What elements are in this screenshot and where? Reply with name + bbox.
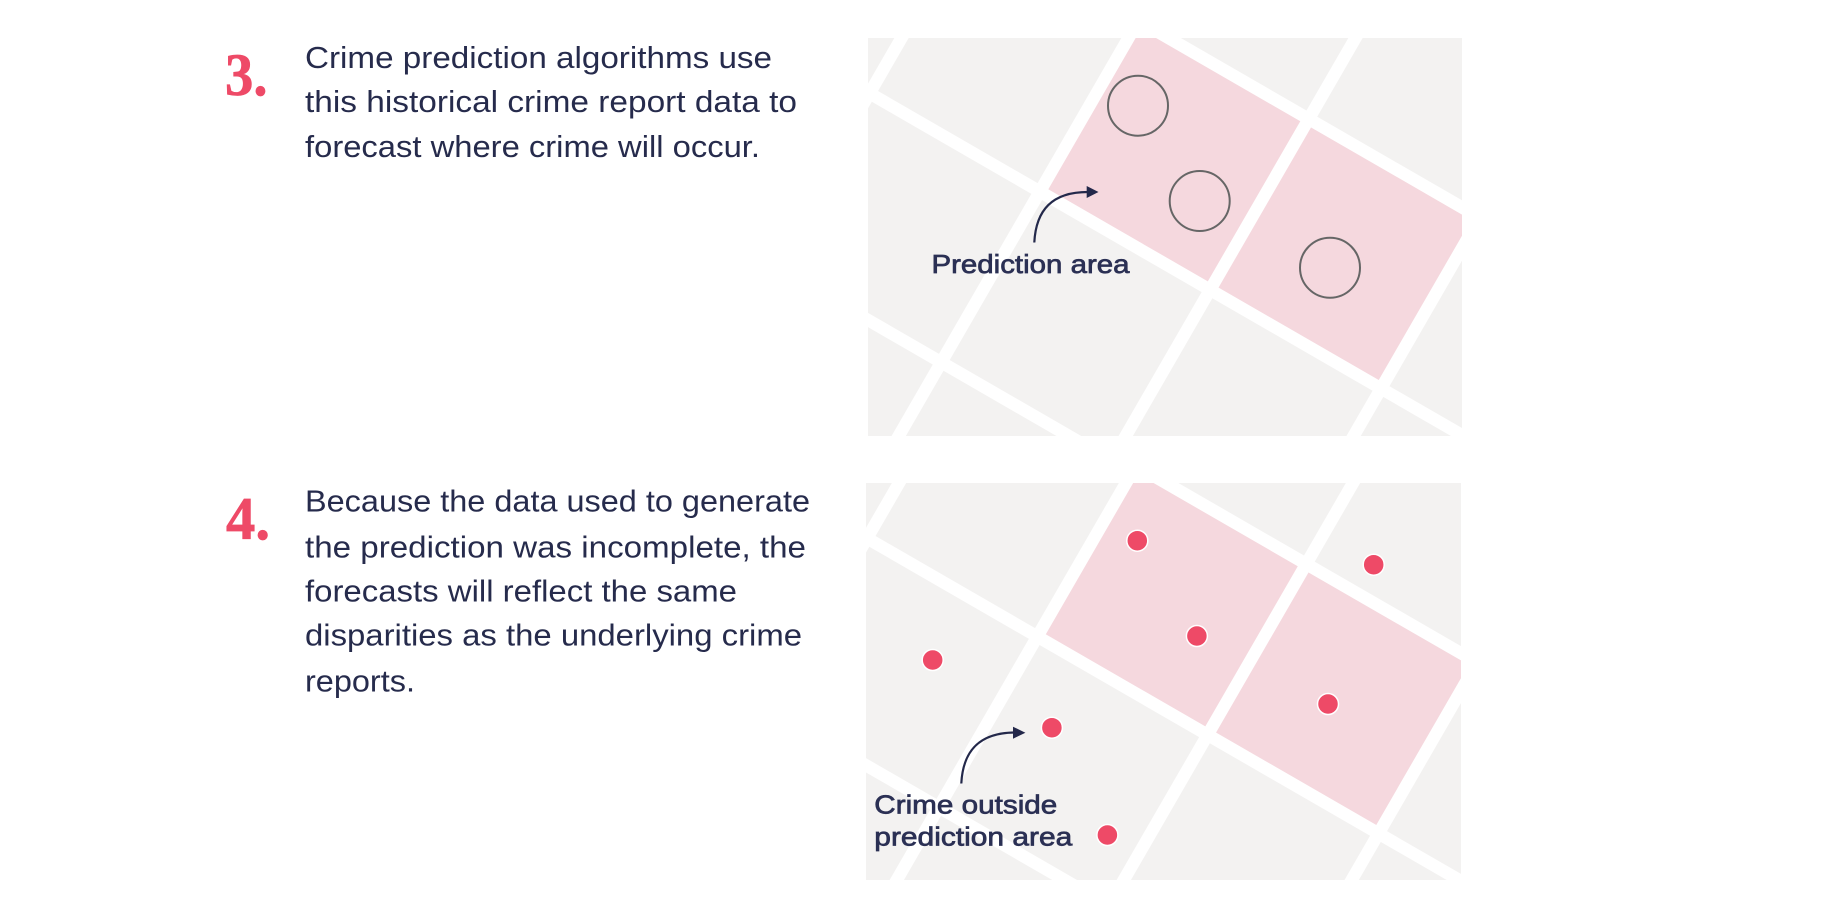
step 3 description: Crime prediction algorithms use	[305, 40, 772, 75]
arrow to crime outside prediction area	[961, 727, 1025, 784]
step 4 description: the prediction was incomplete, the	[305, 530, 806, 564]
crime report dots	[922, 530, 1384, 846]
step 4 description: Because the data used to generate	[305, 484, 810, 518]
label: crime outside prediction area: Crime outside	[874, 790, 1057, 820]
map background and streets	[868, 38, 1462, 436]
step 3 description	[305, 40, 797, 164]
step 3 description: forecast where crime will occur.	[305, 129, 760, 164]
step 4 description: disparities as the underlying crime	[305, 618, 802, 652]
step 4 description	[305, 484, 810, 698]
panel: prediction area map	[868, 38, 1462, 436]
label: crime outside prediction area: prediction area	[874, 822, 1073, 852]
arrow to prediction area	[1034, 186, 1098, 242]
panel: crime outside prediction area map	[866, 483, 1461, 880]
label: crime outside prediction area	[874, 790, 1073, 852]
map background and streets	[866, 483, 1461, 880]
step 4 description: forecasts will reflect the same	[305, 574, 737, 608]
predicted crime circles	[1108, 76, 1360, 298]
step 4 number: 4.	[226, 486, 270, 552]
label: prediction area: Prediction area	[932, 249, 1130, 279]
step 3 number: 3.	[225, 42, 268, 108]
step 3 description: this historical crime report data to	[305, 84, 797, 119]
step 4 description: reports.	[305, 664, 415, 698]
